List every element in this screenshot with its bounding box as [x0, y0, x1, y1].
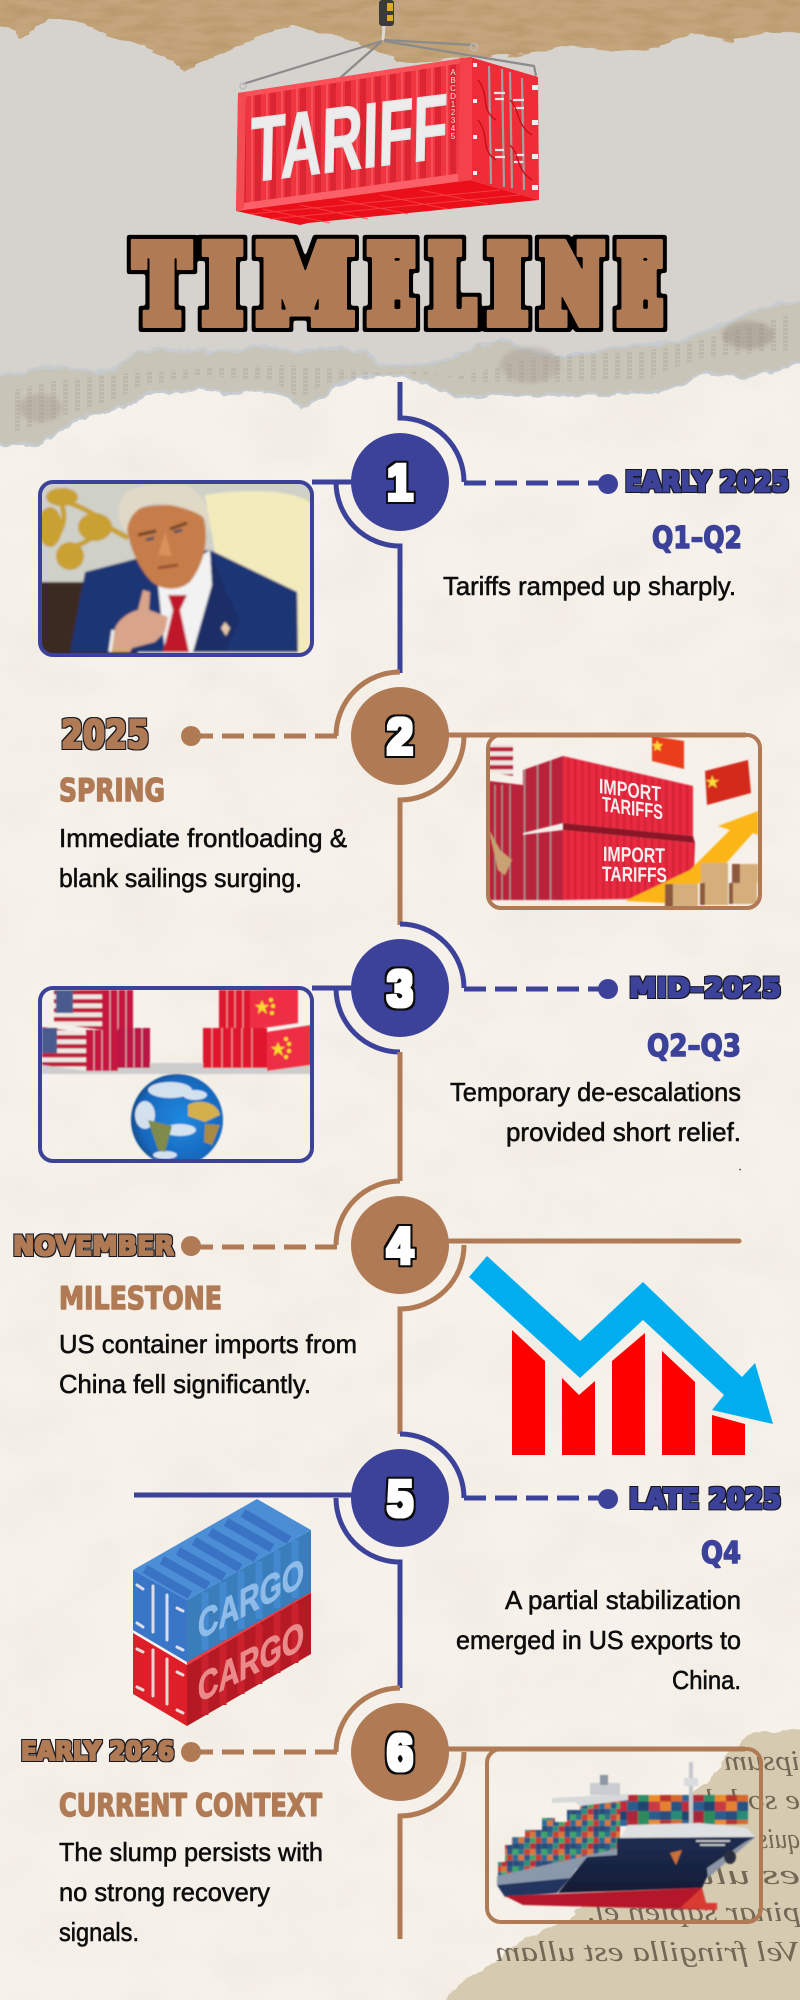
step 4 chart: falling bars with blue arrow: [469, 1256, 773, 1455]
step 5 heading: Q4: [701, 1536, 741, 1571]
background: mirrored old-print paper corner: ipsum: [724, 1746, 800, 1777]
step 2 body: Immediate frontloading &: [59, 823, 347, 853]
step 4 marker: 4: [387, 1217, 414, 1274]
step 3 dot: [598, 979, 618, 999]
container code: D: [450, 92, 456, 101]
step 3 date label: MID–2025: [629, 973, 781, 1004]
step 6 body: The slump persists with: [59, 1837, 323, 1867]
step 5 icon: stacked cargo containers: [133, 1499, 311, 1726]
bars: [512, 1330, 745, 1455]
step 1 heading: Q1–Q2: [652, 521, 742, 556]
step 2 marker: 2: [387, 708, 413, 765]
step 4 body: China fell significantly.: [59, 1369, 311, 1399]
background: mirrored old-print paper corner: pinar sapien el.: [586, 1897, 800, 1928]
step 6 body: signals.: [59, 1917, 139, 1947]
container code: 5: [451, 132, 456, 141]
container code: 1: [451, 100, 456, 109]
title: TIMELINE: T: [136, 222, 188, 347]
container code: A: [450, 68, 456, 77]
container code: 4: [451, 124, 456, 133]
step 6 body: [59, 1837, 323, 1947]
image label: import tariffs: IMPORT: [599, 775, 661, 806]
step 5 marker: [351, 1449, 449, 1547]
step 6 marker: 6: [387, 1724, 413, 1781]
image label: import tariffs: [599, 775, 667, 887]
step 5 date label: LATE 2025: [629, 1482, 781, 1515]
step 3 marker: [351, 939, 449, 1037]
title: TIMELINE: N: [542, 222, 602, 347]
step 6 date label: EARLY 2026: [21, 1737, 174, 1767]
step 1 body: Tariffs ramped up sharply.: [443, 571, 736, 601]
step 3 body: Temporary de-escalations: [450, 1077, 741, 1107]
step 5 body: A partial stabilization: [505, 1585, 741, 1615]
step 2 body: blank sailings surging.: [59, 863, 302, 893]
step 2 body: [59, 823, 347, 893]
step 3 body: [450, 1077, 741, 1172]
step 2 heading: SPRING: [59, 773, 165, 809]
step 4 body: US container imports from: [59, 1329, 357, 1359]
step 6 marker: [351, 1703, 449, 1801]
step 1 photo: pointing president: [38, 480, 314, 662]
container code: 3: [451, 116, 456, 125]
step 5 body: [456, 1585, 741, 1695]
title: TIMELINE: I: [489, 222, 526, 347]
text: E: [620, 222, 660, 347]
step 3 body: .: [739, 1163, 741, 1172]
step 1 dot: [598, 474, 618, 494]
image label: import tariffs: TARIFFS: [602, 863, 667, 887]
background: newsprint torn strip: [0, 302, 800, 445]
step 4 marker: [351, 1196, 449, 1294]
step 3 body: provided short relief.: [506, 1117, 741, 1147]
image label: import tariffs: IMPORT: [603, 843, 665, 868]
background: mirrored old-print paper corner: e sodal: [706, 1785, 800, 1816]
step 5 marker: 5: [387, 1470, 413, 1527]
background: mirrored old-print paper corner: Vel fringilla est ullam: [495, 1937, 800, 1968]
timeline spine: blue and brown connectors: [134, 382, 745, 1939]
step 3 image: containers balanced on globe: [40, 988, 312, 1166]
step 5 dot: [598, 1489, 618, 1509]
step 3 heading: Q2–Q3: [647, 1029, 741, 1064]
step 2 image: import tariff containers: [488, 735, 760, 908]
container code: 2: [451, 108, 456, 117]
container label: red CARGO: CARGO: [198, 1612, 304, 1712]
down arrow: [469, 1256, 773, 1424]
background: grey header paper: [0, 0, 800, 390]
container label: TARIFF: TARIFF: [250, 74, 449, 202]
background: mirrored old-print paper corner: es ultr: [684, 1860, 800, 1891]
title: TIMELINE: I: [204, 222, 241, 347]
step 2 dot: [181, 726, 201, 746]
step 2 marker: [351, 687, 449, 785]
step 1 marker: [351, 433, 449, 531]
step 6 image: container ship: [487, 1749, 761, 1922]
step 6 body: no strong recovery: [59, 1877, 270, 1907]
container code: C: [450, 84, 456, 93]
container label: blue CARGO: CARGO: [198, 1549, 304, 1649]
step 6 dot: [181, 1742, 201, 1762]
step 4 dot: [181, 1236, 201, 1256]
background: mirrored old-print paper corner: quis: [758, 1824, 800, 1855]
step 2 date label: 2025: [61, 713, 149, 758]
title: TIMELINE: M: [258, 222, 353, 347]
image label: import tariffs: TARIFFS: [602, 793, 663, 825]
container code: B: [450, 76, 456, 85]
step 6 heading: CURRENT CONTEXT: [59, 1788, 322, 1824]
background: kraft torn strip: [0, 0, 800, 72]
step 4 body: [59, 1329, 357, 1399]
background: mirrored old-print paper corner: [439, 1727, 800, 2000]
step 5 body: China.: [672, 1665, 741, 1695]
step 3 marker: 3: [387, 960, 413, 1017]
step 4 date label: NOVEMBER: [13, 1231, 174, 1262]
title: TIMELINE: L: [431, 222, 473, 347]
title: TIMELINE: E: [370, 222, 413, 347]
icon: red TARIFF shipping container: [236, 57, 539, 225]
step 4 heading: MILESTONE: [59, 1281, 222, 1317]
step 1 marker: 1: [387, 454, 413, 511]
step 5 body: emerged in US exports to: [456, 1625, 741, 1655]
icon: crane hook and slings: [240, 0, 536, 89]
